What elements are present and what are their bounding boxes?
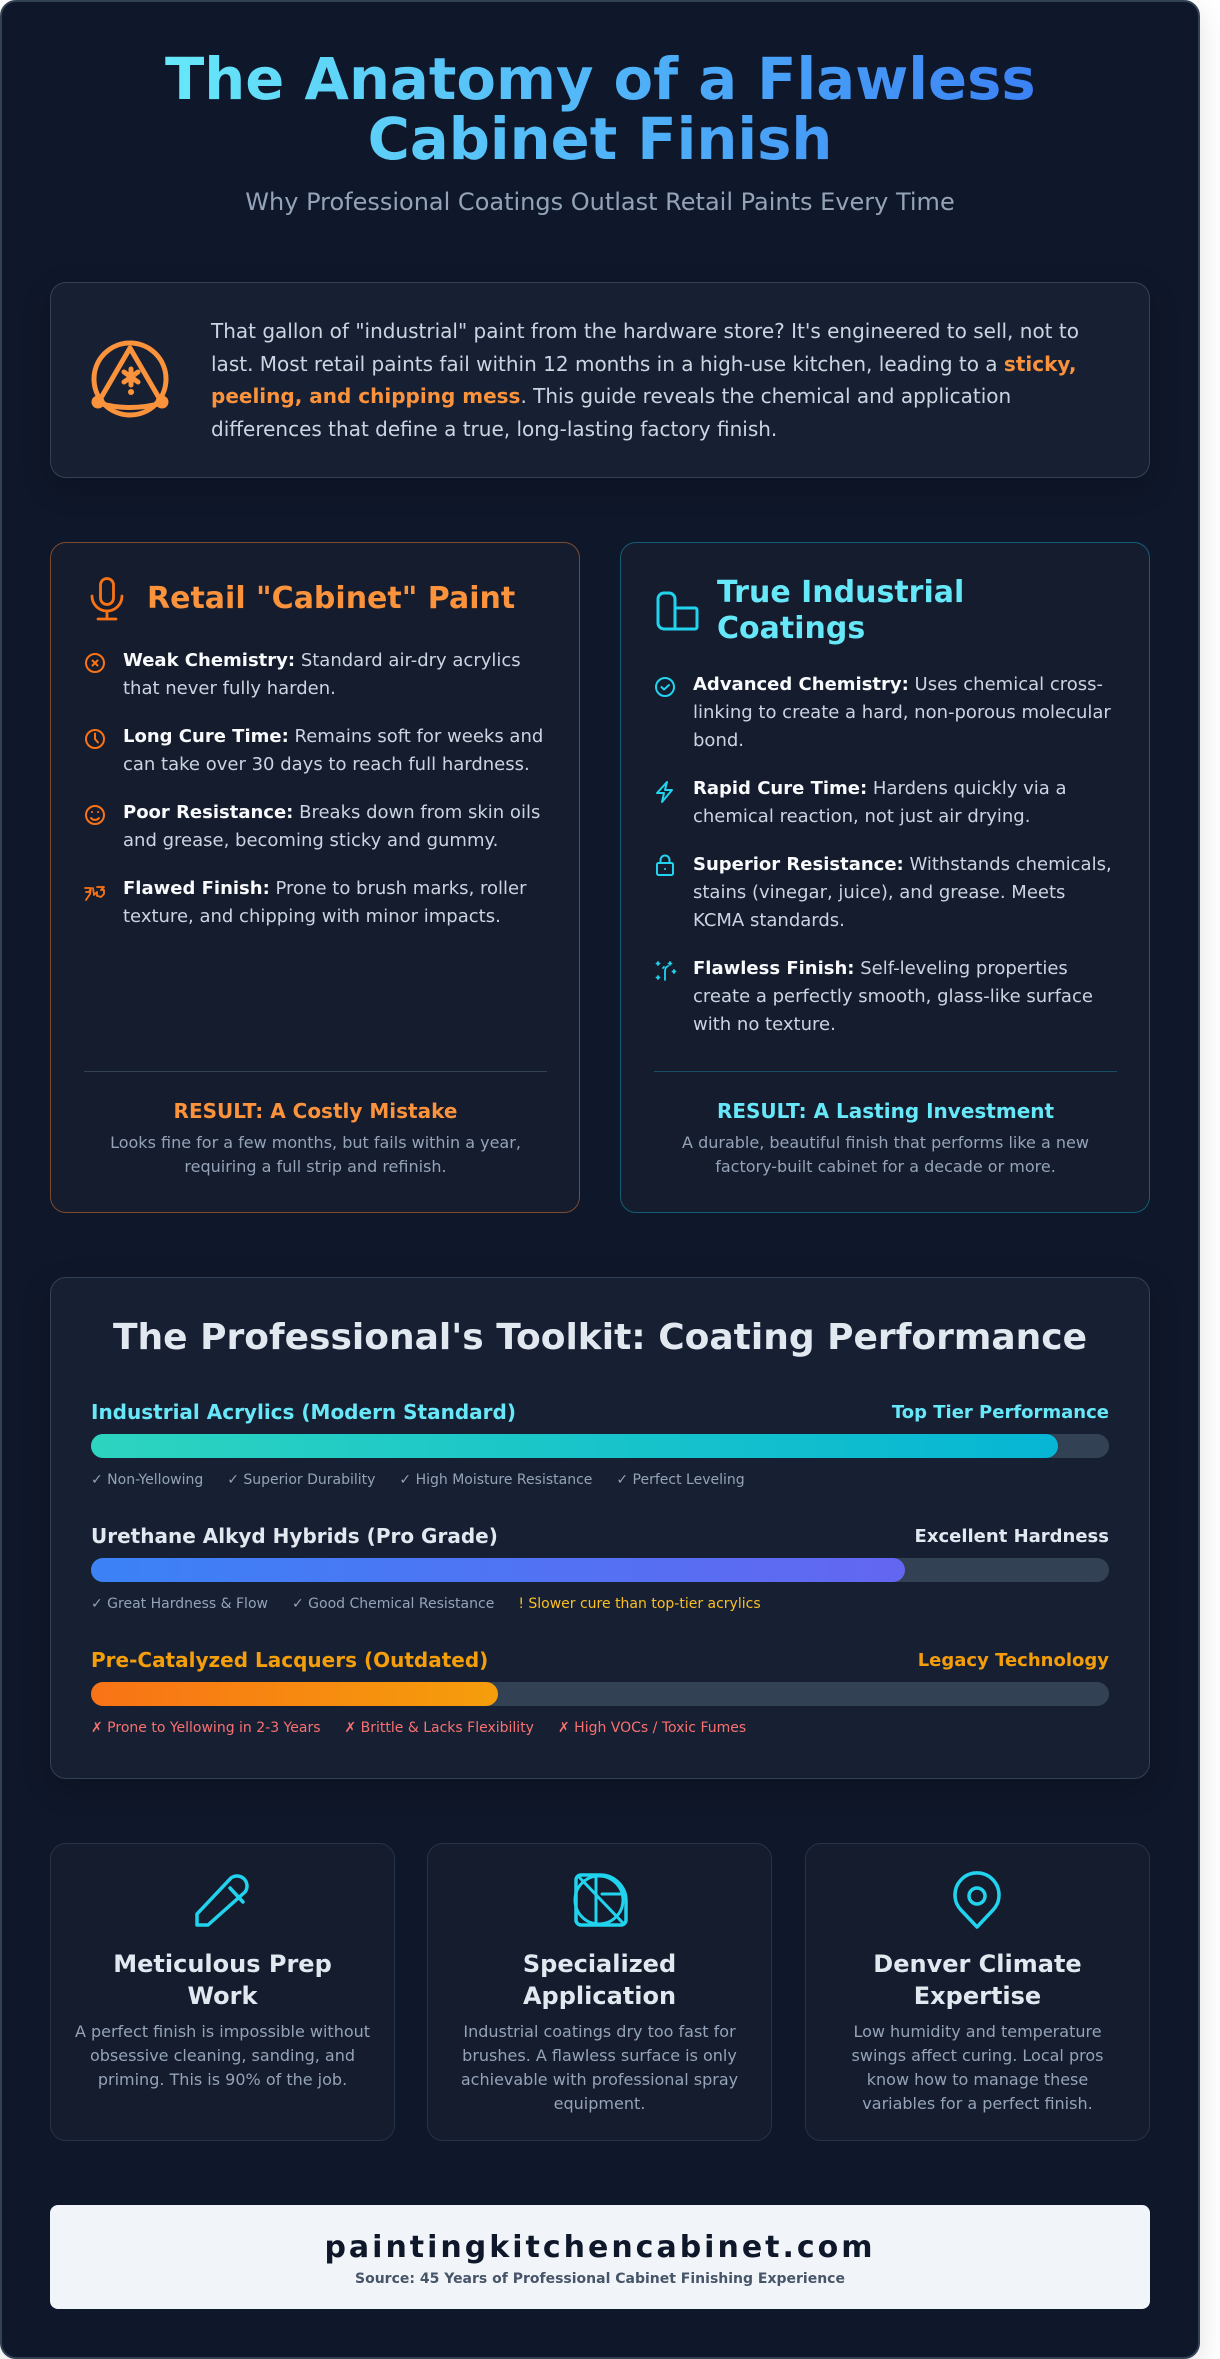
feature title: prep: Work bbox=[188, 1982, 257, 2010]
industrial list item: finish: Flawless Finish: Self-leveling properties bbox=[693, 958, 1068, 979]
panel: retail paint bbox=[50, 542, 580, 1213]
feature text: application: equipment. bbox=[554, 2094, 645, 2112]
bar notes: lacquers: ✗ Prone to Yellowing in 2-3 Years ✗ Brittle & Lacks Flexibility ✗ High VOCs / Toxic Fumes bbox=[91, 1720, 746, 1736]
feature title: climate: Expertise bbox=[914, 1982, 1041, 2010]
retail list item: finish: texture, and chipping with minor impacts. bbox=[123, 906, 501, 927]
panel: professional toolkit bbox=[50, 1277, 1150, 1779]
industrial result text: factory-built cabinet for a decade or more. bbox=[715, 1157, 1056, 1176]
intro text: last. Most retail paints fail within 12 months in a high-use kitchen, leading to a sticky, bbox=[211, 352, 1076, 376]
feature text: climate: variables for a perfect finish. bbox=[862, 2094, 1093, 2112]
retail list item: cure time: can take over 30 days to reach full hardness. bbox=[123, 754, 530, 775]
title bbox=[165, 50, 1035, 170]
industrial list item: cure time bbox=[693, 778, 1067, 827]
bar label: lacquers: Pre-Catalyzed Lacquers (Outdated) bbox=[91, 1648, 488, 1672]
industrial list item: resistance bbox=[693, 854, 1112, 931]
heading: industrial coatings bbox=[717, 575, 964, 646]
retail list icons bbox=[84, 653, 105, 901]
industrial list text bbox=[693, 674, 1111, 751]
retail list item: resistance: and grease, becoming sticky and gummy. bbox=[123, 830, 498, 851]
bar label: industrial acrylics: Industrial Acrylics (Modern Standard) bbox=[91, 1400, 516, 1424]
industrial list item: resistance: KCMA standards. bbox=[693, 910, 845, 931]
retail list text: Weak Chemistry: Standard air-dry acrylics bbox=[123, 650, 521, 671]
heading: industrial coatings: Coatings bbox=[717, 611, 865, 646]
feature text: prep: priming. This is 90% of the job. bbox=[98, 2070, 347, 2088]
retail list item: finish bbox=[123, 878, 527, 927]
bar notes: urethane alkyd: ✓ Great Hardness & Flow ✓ Good Chemical Resistance ! Slower cure than top-tier acrylics bbox=[91, 1596, 761, 1612]
industrial list text: bond. bbox=[693, 730, 744, 751]
intro text: peeling, and chipping mess. This guide reveals the chemical and application bbox=[211, 384, 1011, 408]
feature text: prep: obsessive cleaning, sanding, and bbox=[90, 2046, 355, 2064]
title: Cabinet Finish bbox=[368, 106, 832, 173]
retail result text bbox=[110, 1133, 521, 1176]
industrial result heading: RESULT: A Lasting Investment bbox=[717, 1099, 1054, 1123]
industrial list item: resistance: Superior Resistance: Withstands chemicals, bbox=[693, 854, 1112, 875]
bar value: excellent hardness: Excellent Hardness bbox=[915, 1526, 1109, 1547]
panel: intro warning bbox=[50, 282, 1150, 478]
feature title: climate bbox=[873, 1950, 1082, 2010]
icon: microphone bbox=[90, 577, 124, 620]
feature title: application: Specialized bbox=[523, 1950, 676, 1978]
industrial result text: A durable, beautiful finish that performs like a new bbox=[682, 1133, 1089, 1152]
subtitle: Why Professional Coatings Outlast Retail Paints Every Time bbox=[245, 188, 955, 216]
retail result heading: RESULT: A Costly Mistake bbox=[174, 1099, 457, 1123]
industrial result text bbox=[682, 1133, 1089, 1176]
feature text: climate bbox=[852, 2022, 1103, 2112]
panel: industrial coatings bbox=[620, 542, 1150, 1213]
retail list text: that never fully harden. bbox=[123, 678, 336, 699]
feature text: prep: A perfect finish is impossible without bbox=[75, 2022, 370, 2040]
bar value: legacy technology: Legacy Technology bbox=[918, 1650, 1109, 1671]
retail result text: requiring a full strip and refinish. bbox=[184, 1157, 447, 1176]
bar notes: industrial acrylics: ✓ Non-Yellowing ✓ Superior Durability ✓ High Moisture Resistance ✓ Perfect Leveling bbox=[91, 1472, 745, 1488]
footer website: paintingkitchencabinet.com bbox=[324, 2230, 876, 2265]
intro text bbox=[210, 319, 1079, 441]
feature text: application: Industrial coatings dry too fast for bbox=[463, 2022, 736, 2040]
retail list item: resistance bbox=[123, 802, 540, 851]
bar: lacquers bbox=[91, 1682, 1109, 1706]
industrial list item: finish: with no texture. bbox=[693, 1014, 836, 1035]
bar: industrial acrylics bbox=[91, 1434, 1109, 1458]
bar value: top tier: Top Tier Performance bbox=[892, 1402, 1109, 1423]
industrial list text: linking to create a hard, non-porous molecular bbox=[693, 702, 1111, 723]
footer source: Source: 45 Years of Professional Cabinet Finishing Experience bbox=[355, 2271, 845, 2287]
feature text: climate: Low humidity and temperature bbox=[853, 2022, 1102, 2040]
feature text: climate: swings affect curing. Local pros bbox=[852, 2046, 1103, 2064]
retail result text: Looks fine for a few months, but fails within a year, bbox=[110, 1133, 521, 1152]
industrial list item: finish bbox=[693, 958, 1093, 1035]
intro text: differences that define a true, long-lasting factory finish. bbox=[211, 417, 777, 441]
footer band bbox=[50, 2205, 1150, 2309]
panel: meticulous prep bbox=[50, 1843, 395, 2141]
feature title: prep: Meticulous Prep bbox=[113, 1950, 332, 1978]
toolkit heading: The Professional's Toolkit: Coating Performance bbox=[113, 1317, 1087, 1358]
feature text: application bbox=[461, 2022, 738, 2112]
feature text: application: achievable with professional spray bbox=[461, 2070, 738, 2088]
industrial list text: Advanced Chemistry: Uses chemical cross- bbox=[693, 674, 1103, 695]
heading: retail paint: Retail "Cabinet" Paint bbox=[147, 581, 515, 616]
industrial list item: resistance: stains (vinegar, juice), and grease. Meets bbox=[693, 882, 1065, 903]
heading: industrial coatings: True Industrial bbox=[717, 575, 964, 610]
retail list item: finish: Flawed Finish: Prone to brush marks, roller bbox=[123, 878, 527, 899]
retail list item: resistance: Poor Resistance: Breaks down from skin oils bbox=[123, 802, 540, 823]
retail list item: cure time: Long Cure Time: Remains soft for weeks and bbox=[123, 726, 543, 747]
feature text: prep bbox=[75, 2022, 370, 2088]
industrial list icons bbox=[655, 677, 676, 981]
feature text: application: brushes. A flawless surface is only bbox=[462, 2046, 737, 2064]
icon: coating blocks bbox=[656, 592, 698, 630]
icon: warning triangle in circle bbox=[92, 340, 168, 418]
feature text: climate: know how to manage these bbox=[867, 2070, 1088, 2088]
feature title: prep bbox=[113, 1950, 332, 2010]
title: The Anatomy of a Flawless bbox=[165, 46, 1036, 113]
retail list item: cure time bbox=[123, 726, 543, 775]
industrial list item: cure time: chemical reaction, not just air drying. bbox=[693, 806, 1030, 827]
intro text: That gallon of "industrial" paint from the hardware store? It's engineered to sell, not to bbox=[211, 319, 1079, 343]
bar: urethane alkyd bbox=[91, 1558, 1109, 1582]
industrial list item: finish: create a perfectly smooth, glass-like surface bbox=[693, 986, 1093, 1007]
divider bbox=[654, 1071, 1117, 1072]
panel: specialized application bbox=[427, 1843, 772, 2141]
retail list text bbox=[123, 650, 521, 699]
panel: denver climate bbox=[805, 1843, 1150, 2141]
bar label: urethane alkyd: Urethane Alkyd Hybrids (Pro Grade) bbox=[91, 1524, 498, 1548]
industrial list item: cure time: Rapid Cure Time: Hardens quickly via a bbox=[693, 778, 1067, 799]
feature title: application bbox=[523, 1950, 676, 2010]
feature title: climate: Denver Climate bbox=[873, 1950, 1082, 1978]
feature title: application: Application bbox=[523, 1982, 676, 2010]
divider bbox=[84, 1071, 547, 1072]
